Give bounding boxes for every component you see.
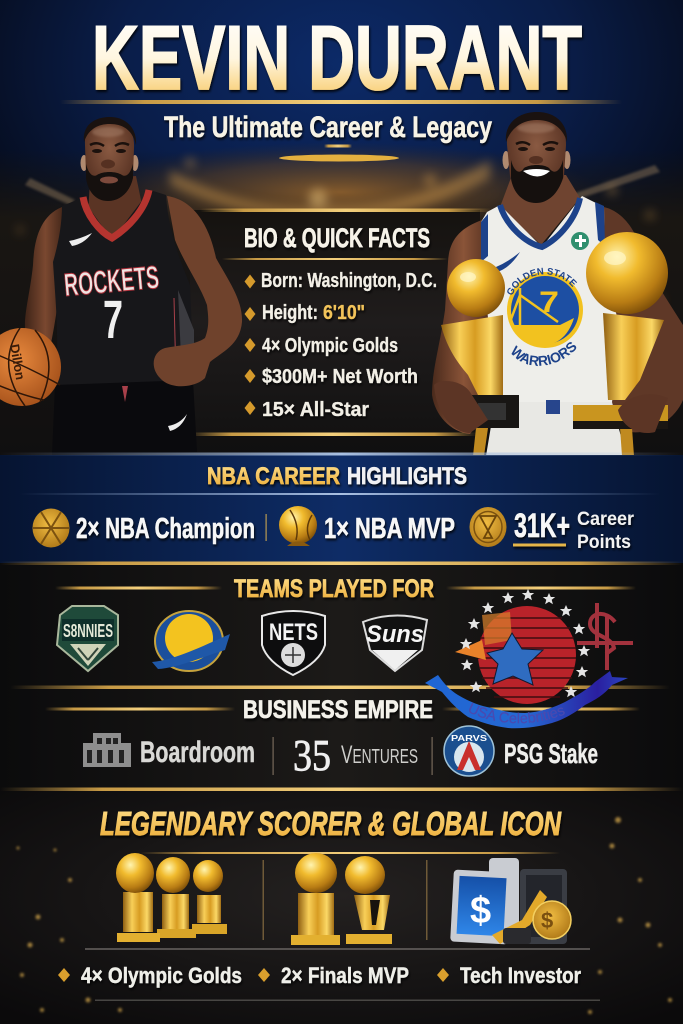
title underline	[60, 100, 622, 104]
icon: tech investor devices	[450, 858, 571, 944]
labels: Tech Investor	[460, 963, 581, 988]
fact list: 4× Olympic Golds	[262, 334, 398, 357]
logo: Suns	[363, 615, 427, 671]
Warriors logo: 7	[539, 286, 559, 319]
fact list: Height:	[262, 301, 318, 324]
jersey wordmark: ROCKETS	[63, 259, 160, 303]
player: Warriors	[432, 112, 683, 455]
labels: 4× Olympic Golds	[81, 963, 242, 988]
logo: Warriors classic	[152, 611, 230, 671]
logo: PSG	[444, 726, 494, 776]
icon: boardroom building	[83, 733, 131, 767]
trophies: Olympic golds	[116, 853, 227, 942]
Warriors logo: WARRIORS	[512, 342, 576, 366]
subtitle ornament	[279, 144, 399, 162]
icon: MVP ball	[279, 506, 317, 546]
panel: business empire	[0, 686, 683, 790]
labels: 2× Finals MVP	[281, 963, 409, 988]
panel: bio and quick facts	[188, 208, 492, 436]
player: Rockets	[0, 117, 242, 456]
logo: 35 Ventures: VENTURES	[341, 741, 418, 769]
fact list: Born: Washington, D.C.	[261, 269, 437, 292]
trophy right	[573, 232, 668, 456]
text: Boardroom: Boardroom	[140, 736, 255, 769]
background: navy top and stadium	[0, 0, 683, 460]
head	[502, 112, 570, 203]
logo: Sonics	[57, 606, 118, 671]
stat: career points	[513, 507, 635, 553]
stat: career points: Points	[577, 532, 631, 553]
fact bullets	[244, 274, 256, 415]
subtitle: The Ultimate Career & Legacy	[164, 111, 492, 144]
Rockets shorts	[52, 380, 197, 456]
logo: Nets: NETS	[269, 619, 318, 646]
icon: tech investor devices: $	[541, 908, 553, 933]
logo: Suns: Suns	[366, 621, 424, 648]
arm and hand	[154, 196, 242, 386]
logo: Nets	[262, 611, 325, 675]
text: PSG stake: PSG Stake	[504, 738, 598, 769]
panel: legendary scorer and global icon	[0, 788, 683, 1024]
panel: NBA career highlights	[0, 452, 683, 563]
Warriors logo	[507, 268, 583, 366]
bio heading: BIO & QUICK FACTS	[244, 223, 430, 253]
watermark badge: USA Celebrities	[425, 589, 628, 728]
Warriors shorts	[486, 402, 626, 456]
watermark badge: USA Celebrities: USA Celebrities	[469, 702, 565, 724]
business heading: BUSINESS EMPIRE	[243, 696, 433, 724]
hands	[434, 381, 668, 433]
basketball: Dillon	[7, 343, 28, 381]
fact list: $300M+ Net Worth	[262, 365, 418, 388]
fact list: 6'10"	[323, 301, 365, 324]
logo: Rockets	[577, 603, 633, 670]
highlights heading: NBA CAREER	[207, 463, 340, 490]
fact list	[261, 269, 437, 421]
jersey number: 7	[103, 290, 123, 350]
logo: Sonics: S8NNIES	[63, 621, 113, 641]
icon: tech investor devices: $	[470, 890, 491, 932]
stat: career points: Career	[577, 509, 635, 530]
stat: NBA champion: 2× NBA Champion	[76, 513, 255, 545]
trophy left	[441, 259, 519, 456]
panel: teams played for	[0, 562, 683, 688]
Warriors jersey	[481, 196, 622, 402]
stat: NBA MVP: 1× NBA MVP	[324, 513, 455, 545]
fact list: 15× All-Star	[262, 398, 369, 421]
stat: career points: 31K+	[514, 507, 570, 545]
highlights heading: HIGHLIGHTS	[347, 463, 467, 490]
Warriors logo: GOLDEN STATE	[507, 268, 577, 295]
logo: 35 Ventures: 35	[293, 731, 331, 780]
head	[80, 117, 138, 201]
icon: career points coin	[470, 507, 506, 547]
teams heading: TEAMS PLAYED FOR	[234, 575, 434, 603]
Rockets jersey	[53, 190, 194, 390]
bullets	[58, 968, 449, 982]
logo: 35 Ventures	[293, 731, 418, 780]
highlights heading	[207, 463, 467, 490]
labels	[81, 963, 581, 988]
icon: champion coin	[32, 508, 70, 548]
trophies: Finals MVP	[291, 853, 392, 945]
basketball	[0, 328, 61, 406]
logo: PSG: PARVS	[451, 734, 488, 743]
gold sparkles	[16, 817, 672, 1014]
